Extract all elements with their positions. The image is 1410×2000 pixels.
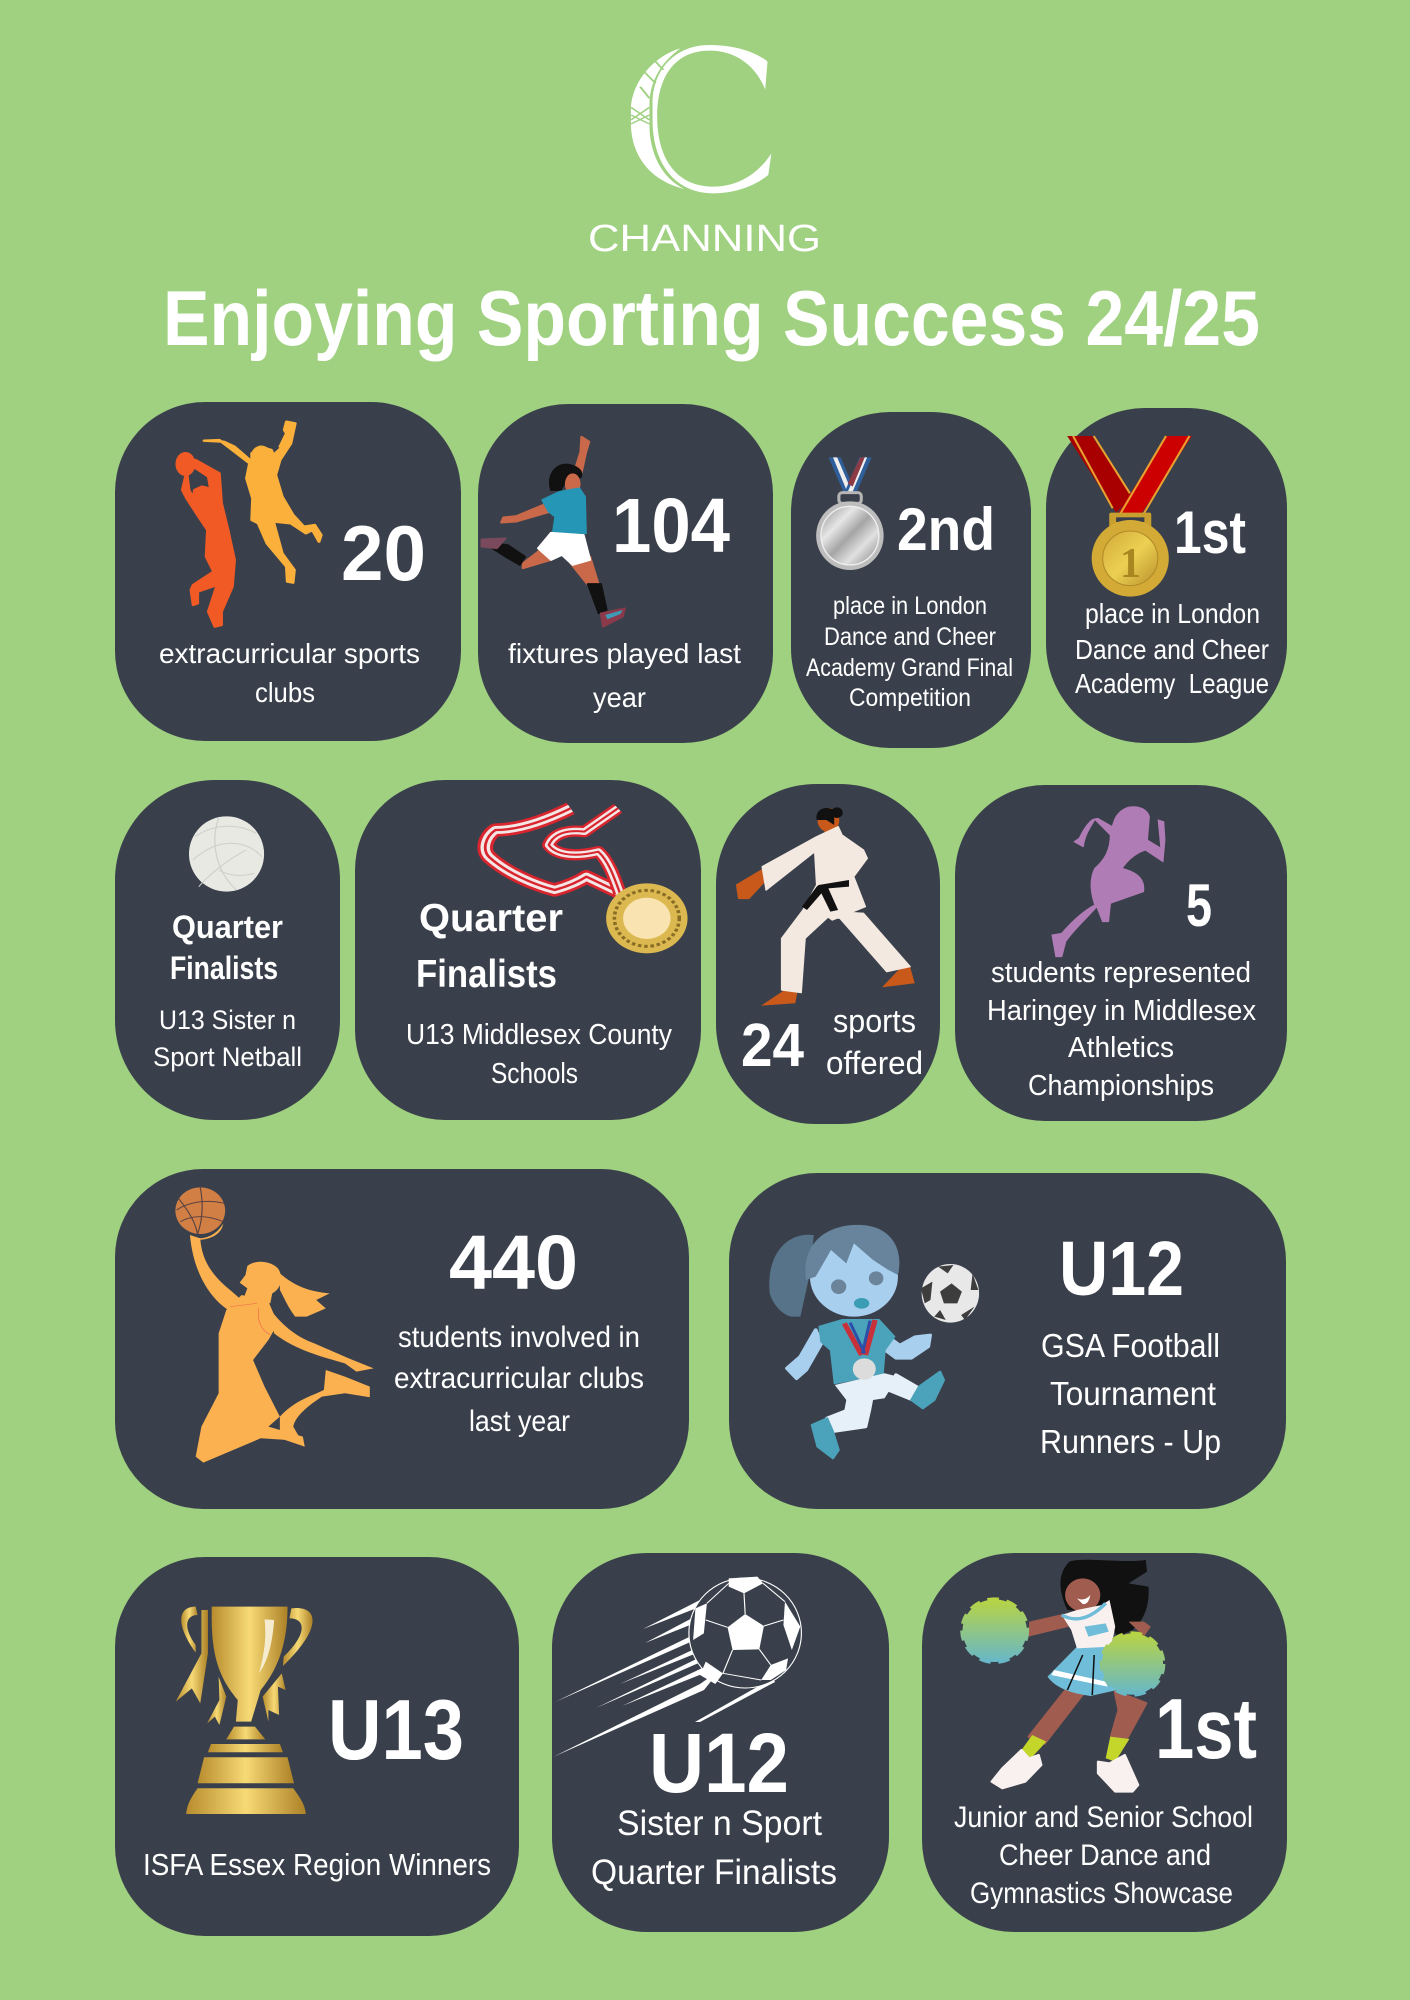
panel: GSA football runners-up — [729, 1173, 1286, 1509]
heading: Quarter — [419, 897, 563, 940]
icon: gold medal: 1 — [1120, 541, 1141, 587]
description: fixtures played last — [508, 638, 741, 669]
panel: cheer dance showcase — [922, 1553, 1287, 1932]
icon: gold trophy — [176, 1607, 313, 1814]
description: clubs — [255, 677, 315, 708]
description: Academy League — [1075, 668, 1269, 699]
icon: karate figure — [737, 807, 915, 1006]
description: ISFA Essex Region Winners — [143, 1847, 491, 1882]
panel: fixtures played — [478, 404, 773, 743]
description — [826, 1003, 923, 1081]
heading: Finalists — [416, 953, 557, 996]
stat: 1st: 1st — [1155, 1682, 1257, 1777]
panel: Sister n Sport quarter finalists — [552, 1553, 889, 1932]
heading: Quarter — [172, 909, 283, 945]
panel: sports offered — [716, 784, 940, 1124]
description: last year — [469, 1405, 570, 1438]
panel: students in clubs — [115, 1169, 689, 1509]
panel: extracurricular sports clubs — [115, 402, 461, 741]
stat: 104: 104 — [612, 483, 730, 569]
heading — [170, 909, 283, 986]
logo: Channing C emblem — [631, 45, 771, 193]
description: Academy Grand Final — [806, 654, 1013, 682]
icon: netball — [189, 816, 264, 892]
description: Sport Netball — [153, 1042, 302, 1072]
icon: two netball players — [175, 422, 321, 627]
description — [394, 1321, 644, 1438]
description — [153, 1005, 302, 1072]
description: Schools — [491, 1058, 578, 1090]
panel: athletics championships — [955, 785, 1287, 1121]
panel: netball quarter finalists — [115, 780, 340, 1120]
description — [806, 592, 1013, 712]
description — [159, 638, 420, 708]
stat: 440: 440 — [449, 1220, 578, 1306]
description — [1075, 598, 1269, 699]
stat: U12: U12 — [1059, 1226, 1184, 1312]
description: Sister n Sport — [617, 1804, 822, 1843]
stat: 2nd: 2nd — [897, 496, 995, 563]
icon: footballer kicking — [482, 437, 625, 627]
stat: U12: U12 — [649, 1716, 789, 1810]
heading: Finalists — [170, 950, 278, 986]
description: place in London — [1085, 598, 1260, 629]
panel: ISFA Essex winners — [115, 1557, 519, 1936]
description: Tournament — [1050, 1375, 1216, 1412]
panel: 2nd place grand final — [791, 412, 1031, 748]
description: Cheer Dance and — [999, 1839, 1211, 1872]
icon: purple runner — [1052, 807, 1165, 957]
description — [406, 1019, 672, 1090]
description: GSA Football — [1041, 1327, 1220, 1364]
description: place in London — [833, 592, 987, 620]
stat: 24: 24 — [741, 1011, 804, 1079]
description: Competition — [849, 684, 971, 712]
stat: 20: 20 — [341, 509, 426, 597]
description: extracurricular clubs — [394, 1362, 644, 1395]
description: Haringey in Middlesex — [987, 995, 1256, 1027]
icon: basketball player — [175, 1187, 374, 1463]
description: sports — [833, 1003, 916, 1039]
description: year — [593, 682, 646, 713]
icon: child footballer — [769, 1225, 979, 1458]
description: Dance and Cheer — [824, 623, 996, 651]
icon: cheerleader — [963, 1560, 1163, 1792]
description: Championships — [1028, 1070, 1214, 1102]
heading — [416, 897, 563, 996]
description: Junior and Senior School — [954, 1801, 1253, 1834]
description: U13 Sister n — [159, 1005, 296, 1035]
panel: 1st place league — [1046, 408, 1287, 743]
description: extracurricular sports — [159, 638, 420, 669]
panel: county schools quarter finalists — [355, 780, 701, 1120]
description: Gymnastics Showcase — [970, 1877, 1233, 1910]
description — [987, 957, 1256, 1102]
stat: 5: 5 — [1186, 872, 1212, 939]
description: Runners - Up — [1040, 1423, 1221, 1460]
icon: gold medal — [1067, 436, 1192, 597]
icon: ribbon and gold medal — [485, 808, 688, 953]
description — [591, 1804, 837, 1892]
description: offered — [826, 1045, 923, 1081]
description: Quarter Finalists — [591, 1853, 837, 1892]
description — [954, 1801, 1253, 1910]
description: Dance and Cheer — [1075, 634, 1269, 665]
description: U13 Middlesex County — [406, 1019, 672, 1051]
icon: football with speed lines — [553, 1577, 801, 1757]
description: students involved in — [398, 1321, 640, 1354]
description — [508, 638, 741, 713]
description: students represented — [991, 957, 1251, 989]
title: Enjoying Sporting Success 24/25 — [163, 274, 1260, 362]
stat: 1st: 1st — [1174, 499, 1246, 566]
logo wordmark: CHANNING — [588, 218, 821, 260]
stat: U13: U13 — [328, 1683, 464, 1778]
description: Athletics — [1068, 1032, 1174, 1064]
description — [1040, 1327, 1221, 1460]
icon: silver medal — [816, 457, 884, 570]
